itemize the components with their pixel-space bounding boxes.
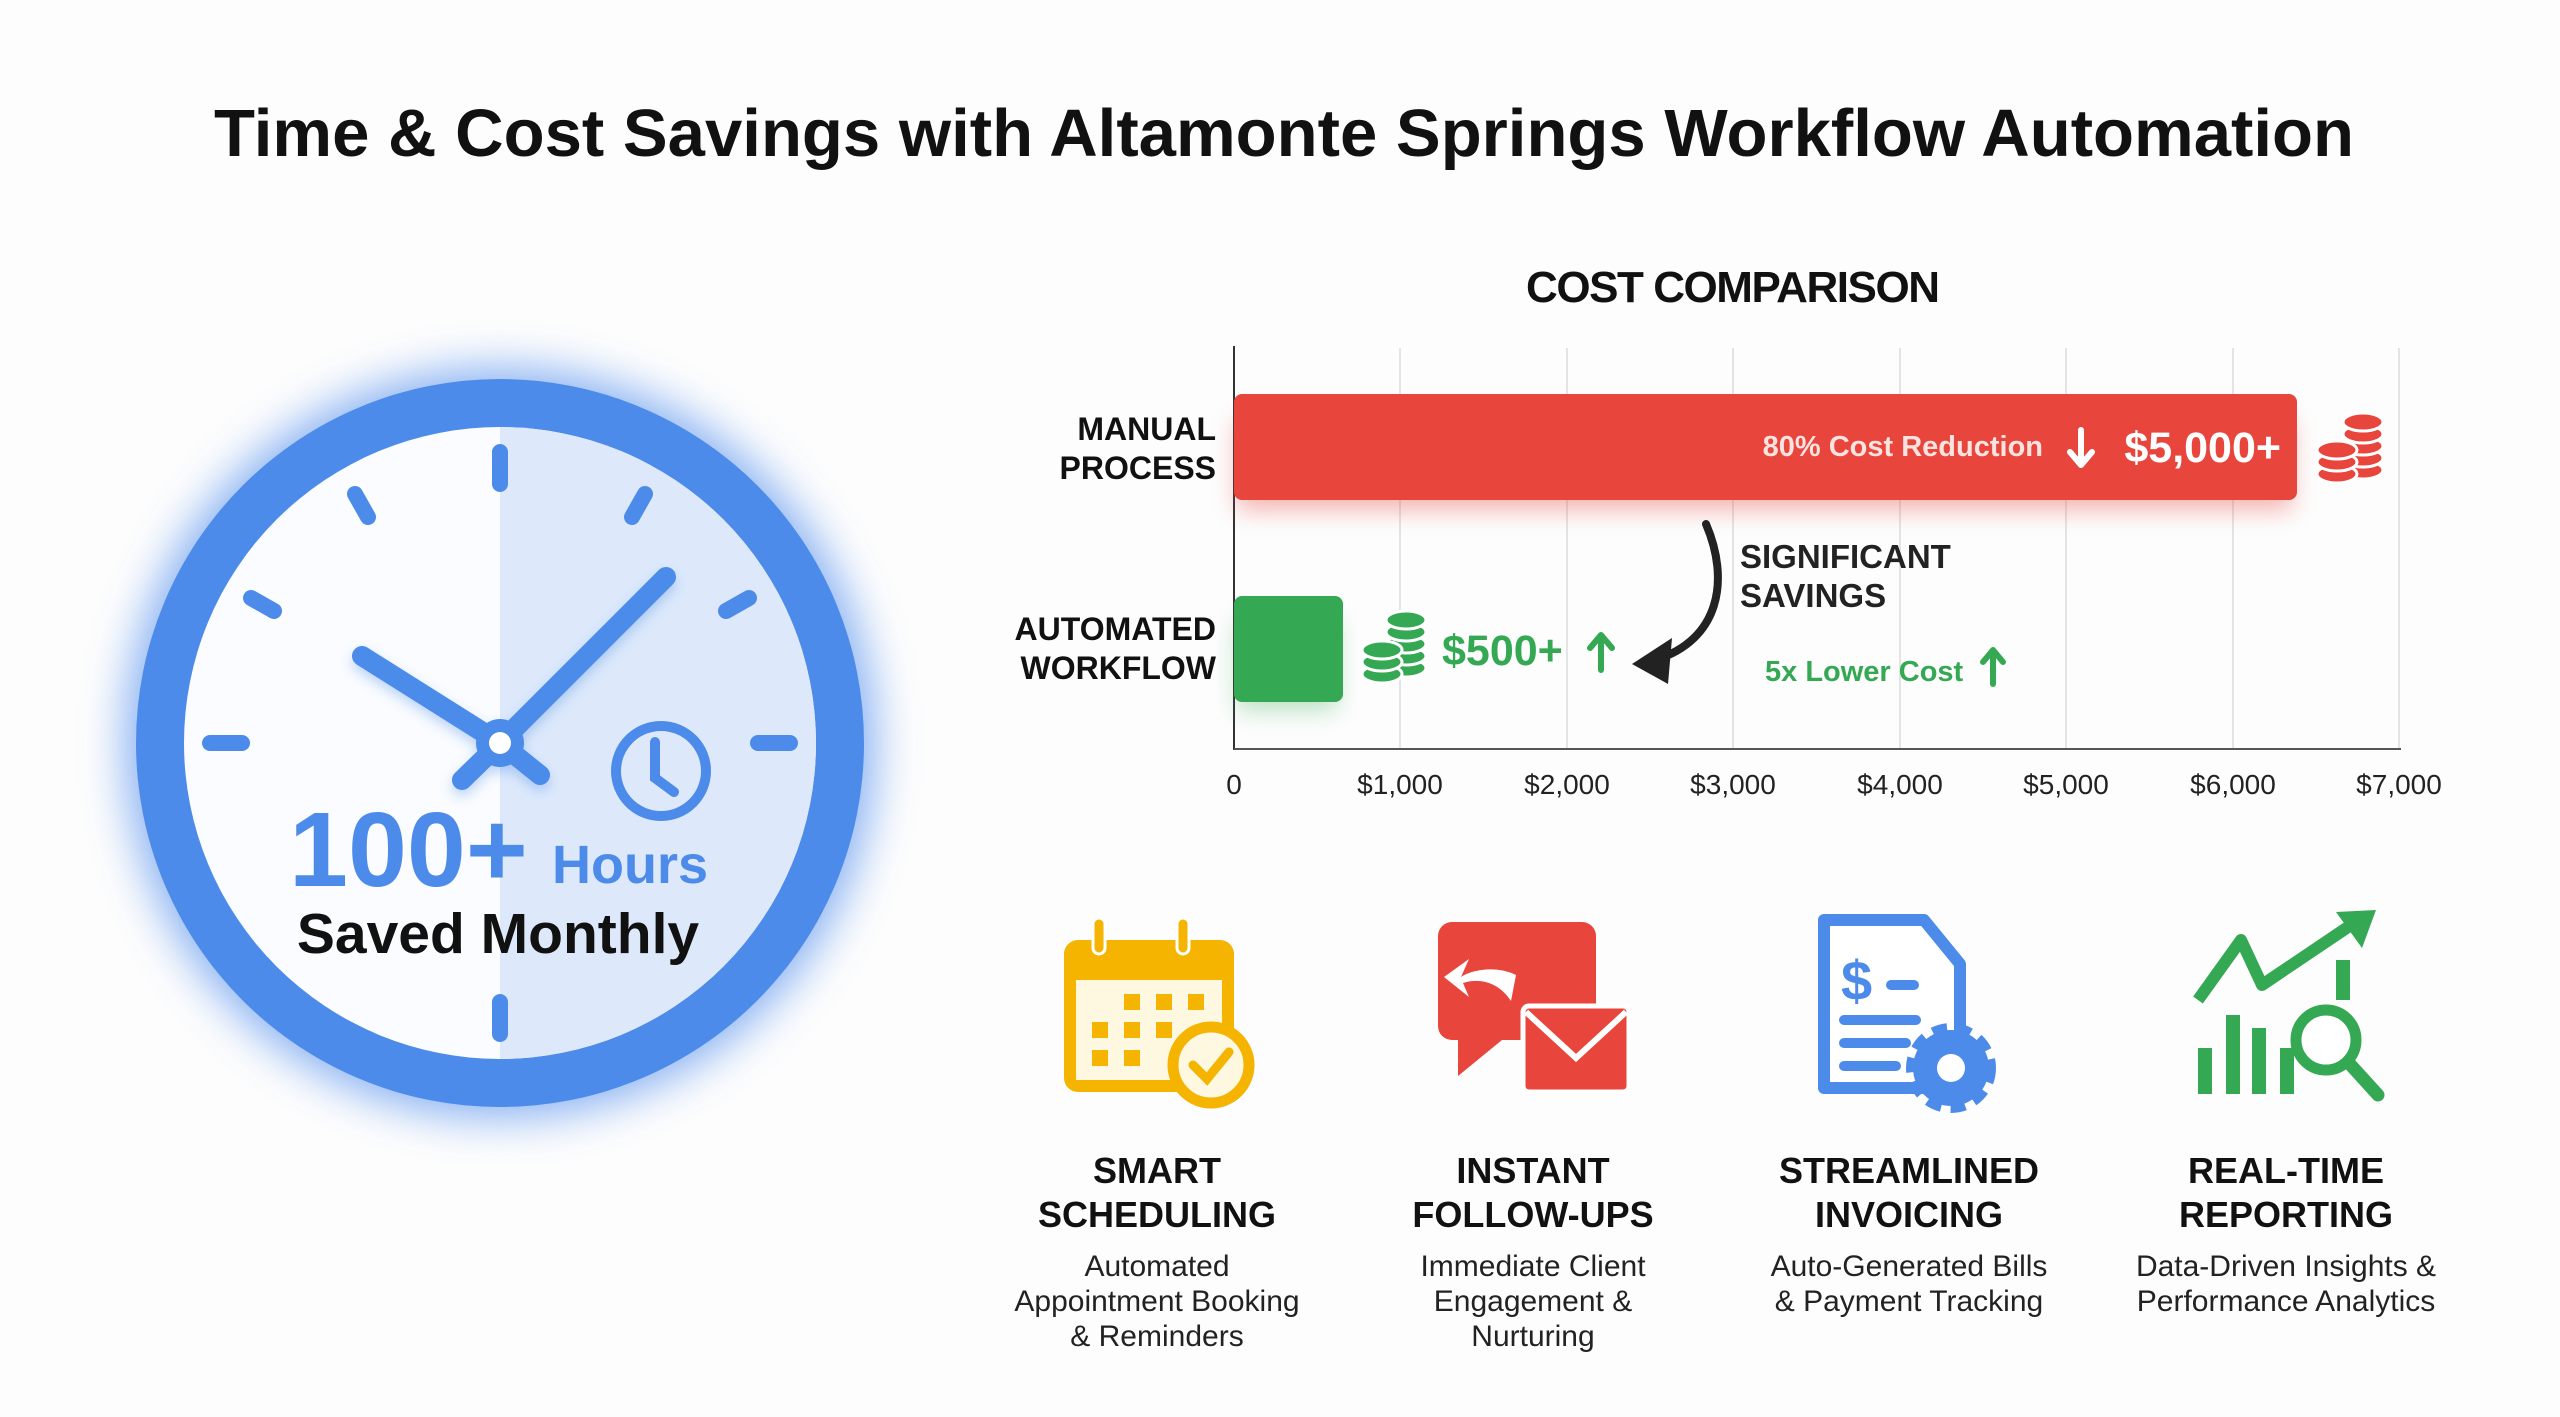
- x axis labels: $4,000: [1857, 769, 1943, 800]
- clock: [125, 368, 875, 1118]
- feature descriptions: & Reminders: [1070, 1320, 1244, 1353]
- hours saved text: Hours: [552, 835, 708, 895]
- x axis labels: 0: [1226, 769, 1242, 800]
- gridlines: [1400, 348, 2399, 748]
- feature titles: REAL-TIME: [2188, 1150, 2384, 1191]
- row labels: WORKFLOW: [1020, 650, 1217, 686]
- feature titles: INVOICING: [1815, 1194, 2003, 1235]
- icon: small clock: [616, 726, 706, 816]
- hours saved text: 100+: [289, 791, 528, 909]
- feature descriptions: Performance Analytics: [2137, 1285, 2435, 1318]
- feature descriptions: Immediate Client: [1420, 1250, 1646, 1283]
- feature titles: SMART: [1093, 1150, 1221, 1191]
- feature titles: FOLLOW-UPS: [1412, 1194, 1654, 1235]
- icon: chart with magnifier: [2198, 910, 2378, 1095]
- icon: calendar: [1064, 918, 1249, 1103]
- x axis labels: $1,000: [1357, 769, 1443, 800]
- bar: manual: $5,000+: [2124, 424, 2281, 472]
- chart title: COST COMPARISON: [1526, 263, 1940, 312]
- x axis labels: $5,000: [2023, 769, 2109, 800]
- icon: green coins: [1362, 611, 1426, 683]
- feature descriptions: Data-Driven Insights &: [2136, 1250, 2436, 1283]
- feature descriptions: Nurturing: [1471, 1320, 1595, 1353]
- feature descriptions: Automated: [1084, 1250, 1230, 1283]
- automated value: $500+: [1442, 627, 1563, 675]
- feature titles: SCHEDULING: [1038, 1194, 1276, 1235]
- feature titles: STREAMLINED: [1779, 1150, 2039, 1191]
- feature descriptions: Auto-Generated Bills: [1771, 1250, 2047, 1283]
- chart: cost comparison: [1015, 263, 2442, 800]
- feature descriptions: [1014, 1250, 2436, 1353]
- arrow: curved savings: [1632, 524, 1718, 684]
- row labels: AUTOMATED: [1015, 611, 1216, 647]
- x axis labels: $2,000: [1524, 769, 1610, 800]
- row labels: PROCESS: [1060, 450, 1216, 486]
- callout: 5x lower cost: 5x Lower Cost: [1765, 656, 1964, 688]
- feature descriptions: Engagement &: [1434, 1285, 1632, 1318]
- feature titles: REPORTING: [2179, 1194, 2393, 1235]
- feature descriptions: & Payment Tracking: [1775, 1285, 2043, 1318]
- hours saved text: [289, 791, 708, 966]
- x axis labels: [1226, 769, 2442, 800]
- bar: manual: 80% Cost Reduction: [1763, 431, 2043, 463]
- feature titles: [1038, 1150, 2393, 1235]
- callout: significant savings: [1740, 538, 1951, 614]
- clock hands: [362, 577, 666, 780]
- feature titles: INSTANT: [1456, 1150, 1610, 1191]
- feature descriptions: Appointment Booking: [1014, 1285, 1300, 1318]
- clock ticks: [210, 452, 790, 1034]
- x axis labels: $3,000: [1690, 769, 1776, 800]
- hours saved text: Saved Monthly: [297, 902, 699, 966]
- x axis labels: $6,000: [2190, 769, 2276, 800]
- row labels: [1015, 411, 1217, 686]
- title: Time & Cost Savings with Altamonte Springs Workflow Automation: [214, 96, 2354, 171]
- bar: automated: [1234, 596, 1343, 710]
- callout: significant savings: SAVINGS: [1740, 577, 1886, 614]
- icon: invoice document: [1824, 920, 1989, 1106]
- icon: chat and mail: [1438, 922, 1629, 1092]
- x axis labels: $7,000: [2356, 769, 2442, 800]
- row labels: MANUAL: [1077, 411, 1216, 447]
- icon: invoice document: $: [1841, 949, 1872, 1012]
- bar: manual: [1234, 394, 2297, 510]
- callout: significant savings: SIGNIFICANT: [1740, 538, 1951, 575]
- icon: red coins: [2317, 413, 2383, 483]
- panel: features: [1014, 910, 2436, 1353]
